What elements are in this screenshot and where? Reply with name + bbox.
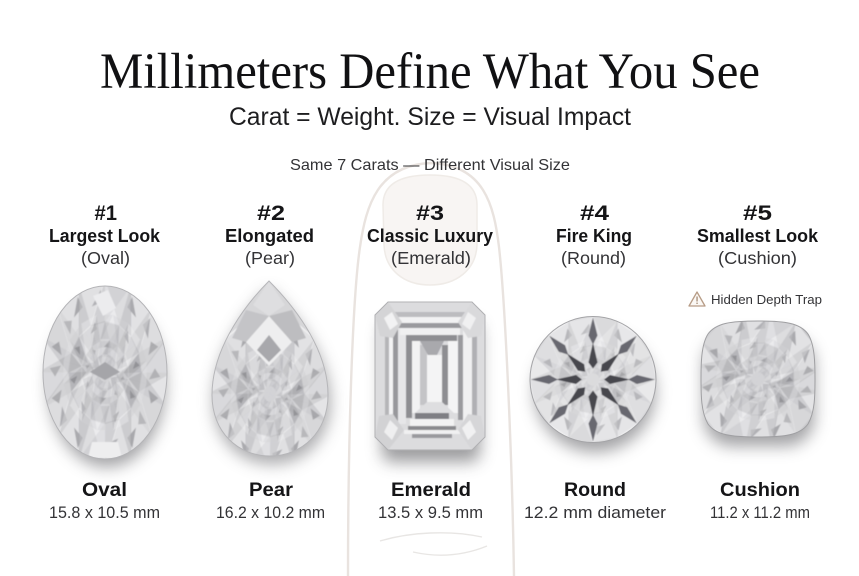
label: cushion size: 11.2 x 11.2 mm	[710, 503, 810, 522]
column 3 heading: emerald: #3	[416, 202, 444, 225]
column 4 heading: round: #4	[580, 202, 609, 225]
label: pear size: 16.2 x 10.2 mm	[216, 503, 325, 522]
warning callout: Hidden Depth Trap	[711, 292, 822, 307]
column 1 heading: oval	[49, 202, 161, 268]
label: oval size	[49, 479, 160, 522]
diamond: pear	[204, 280, 340, 474]
column 2 heading: pear: Elongated	[225, 226, 314, 246]
column 2 heading: pear: #2	[257, 202, 285, 225]
column 1 heading: oval: (Oval)	[81, 248, 130, 268]
column 1 heading: oval: Largest Look	[49, 226, 161, 246]
label: round size	[524, 479, 666, 522]
column 2 heading: pear: (Pear)	[245, 248, 295, 268]
diamond: round	[525, 316, 665, 462]
column 3 heading: emerald: (Emerald)	[391, 248, 471, 268]
horizontal steps	[392, 312, 468, 317]
column 4 heading: round: Fire King	[556, 226, 632, 246]
diamond: cushion	[694, 320, 824, 456]
label: oval size: Oval	[82, 479, 127, 501]
label: pear size: Pear	[249, 479, 293, 501]
column 5 heading: cushion: Smallest Look	[697, 226, 819, 246]
label: emerald size: Emerald	[391, 479, 471, 501]
column 2 heading: pear	[225, 202, 314, 268]
corner facets	[385, 312, 402, 338]
label: emerald size	[378, 479, 483, 522]
column 3 heading: emerald: Classic Luxury	[367, 226, 493, 246]
icon: warning triangle	[689, 292, 705, 306]
label: round size: 12.2 mm diameter	[524, 503, 666, 522]
label: cushion size: Cushion	[720, 479, 800, 501]
subtitle: Carat = Weight. Size = Visual Impact	[229, 103, 631, 131]
caption: Same 7 Carats — Different Visual Size	[290, 157, 570, 174]
diamond: emerald	[375, 302, 485, 462]
column 5 heading: cushion: #5	[743, 202, 772, 225]
label: cushion size	[710, 479, 810, 522]
column 5 heading: cushion	[697, 202, 819, 268]
finger illustration	[348, 163, 514, 576]
column 3 heading: emerald	[367, 202, 493, 268]
fingernail	[383, 175, 477, 285]
vertical steps	[385, 325, 389, 425]
label: emerald size: 13.5 x 9.5 mm	[378, 503, 483, 522]
column 4 heading: round	[556, 202, 632, 268]
label: round size: Round	[564, 479, 626, 501]
knuckle creases	[380, 533, 487, 555]
column 1 heading: oval: #1	[94, 202, 117, 225]
diamond: oval	[38, 286, 176, 477]
label: oval size: 15.8 x 10.5 mm	[49, 503, 160, 522]
label: pear size	[216, 479, 325, 522]
title: Millimeters Define What You See	[100, 44, 760, 100]
column 5 heading: cushion: (Cushion)	[718, 248, 797, 268]
column 4 heading: round: (Round)	[561, 248, 626, 268]
